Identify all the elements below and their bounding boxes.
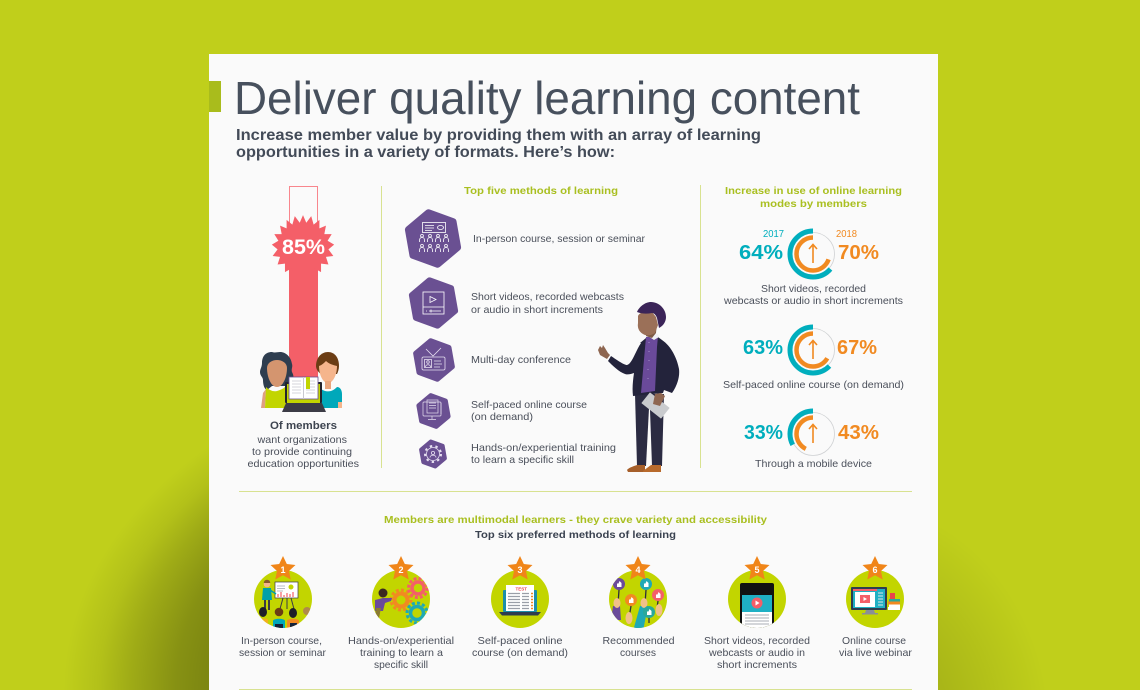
panel: increase in online learning bbox=[723, 185, 904, 470]
icon: hands-on hexagon bbox=[421, 441, 445, 467]
method 5: short videos: short increments bbox=[717, 659, 797, 671]
method 3: self-paced online course: Self-paced online bbox=[478, 635, 563, 647]
text: in-person: In-person course, session or seminar bbox=[473, 233, 645, 245]
method 6: live webinar bbox=[839, 556, 912, 659]
method 4: recommended courses: courses bbox=[620, 647, 656, 659]
text: short videos: or audio in short increments bbox=[471, 304, 603, 316]
stat: mobile device 33% to 43%: Through a mobile device bbox=[755, 458, 872, 470]
panel: 85% of members bbox=[248, 186, 359, 470]
white content panel bbox=[209, 54, 938, 690]
stat: short videos 64% to 70%: Short videos, recorded bbox=[761, 283, 866, 295]
text: hands-on: to learn a specific skill bbox=[471, 454, 574, 466]
method 2: hands-on training: specific skill bbox=[374, 659, 428, 671]
heading: top five methods: Top five methods of learning bbox=[464, 185, 618, 197]
text: multi-day conference: Multi-day conference bbox=[471, 354, 571, 366]
method 5: short videos bbox=[704, 556, 810, 671]
stat: short videos 64% to 70%: 2018 bbox=[836, 229, 857, 240]
method 4: recommended courses: Recommended bbox=[602, 635, 675, 647]
method 1: in-person course bbox=[239, 556, 326, 659]
heading: multimodal learners: Members are multimodal learners - they crave variety and accessibility bbox=[384, 514, 767, 526]
icon: conference hexagon bbox=[416, 341, 452, 379]
method 6: live webinar: via live webinar bbox=[839, 647, 912, 659]
panel: top five methods of learning bbox=[409, 185, 679, 472]
method 6: live webinar: Online course bbox=[842, 635, 906, 647]
subheading: top six methods: Top six preferred methods of learning bbox=[475, 529, 676, 541]
icon: in-person hexagon bbox=[409, 213, 457, 264]
method 2: hands-on training bbox=[348, 556, 454, 671]
stat: self-paced 63% to 67%: 67% bbox=[837, 337, 877, 359]
method 1: in-person course: session or seminar bbox=[239, 647, 326, 659]
icon: self-paced hexagon bbox=[418, 395, 449, 427]
caption: of members: Of members bbox=[270, 420, 337, 432]
title accent tab bbox=[209, 81, 221, 112]
method 3: self-paced online course: TEST bbox=[516, 586, 527, 592]
rank star 3: 3 bbox=[517, 565, 523, 575]
starburst with 85% bbox=[272, 215, 334, 277]
stat: short videos 64% to 70%: webcasts or audio in short increments bbox=[723, 295, 903, 307]
text: self-paced bbox=[471, 399, 587, 423]
caption: of members: to provide continuing bbox=[252, 446, 352, 458]
stat: mobile device 33% to 43%: 33% bbox=[744, 422, 783, 444]
stat: mobile device 33% to 43%: 43% bbox=[838, 422, 879, 444]
heading: increase in use bbox=[725, 185, 902, 210]
method 1: in-person course: In-person course, bbox=[241, 635, 322, 647]
caption: of members: want organizations bbox=[256, 434, 347, 446]
thermometer bar bbox=[289, 186, 318, 385]
method 3: self-paced online course bbox=[472, 556, 568, 659]
rank star 1: 1 bbox=[280, 565, 286, 575]
stat: short videos 64% to 70%: 70% bbox=[838, 242, 879, 264]
text: short videos: Short videos, recorded webcasts bbox=[471, 291, 624, 303]
rank star 6: 6 bbox=[872, 565, 878, 575]
stat: self-paced 63% to 67% bbox=[723, 327, 904, 391]
stat: short videos 64% to 70% bbox=[723, 229, 903, 307]
caption: of members bbox=[248, 420, 359, 470]
starburst with 85%: 85% bbox=[282, 236, 325, 259]
method 5: short videos: webcasts or audio in bbox=[708, 647, 805, 659]
stat: short videos 64% to 70%: 2017 bbox=[763, 229, 784, 240]
method 2: hands-on training: Hands-on/experiential bbox=[348, 635, 454, 647]
illustration: woman, man and laptop bbox=[260, 352, 342, 412]
title: Deliver quality learning content bbox=[234, 72, 860, 124]
text: hands-on: Hands-on/experiential training bbox=[471, 442, 616, 454]
rank star 4: 4 bbox=[635, 565, 641, 575]
panel: top six preferred methods bbox=[239, 556, 912, 671]
method 5: short videos: Short videos, recorded bbox=[704, 635, 810, 647]
subtitle bbox=[236, 127, 761, 161]
rank star 5: 5 bbox=[754, 565, 760, 575]
heading: increase in use: Increase in use of online learning bbox=[725, 185, 902, 197]
text: hands-on bbox=[471, 442, 616, 466]
method 3: self-paced online course: course (on demand) bbox=[472, 647, 568, 659]
subtitle: Increase member value by providing them with an array of learning bbox=[236, 127, 761, 144]
stat: mobile device 33% to 43% bbox=[744, 411, 879, 470]
caption: of members: education opportunities bbox=[248, 458, 359, 470]
method 2: hands-on training: training to learn a bbox=[360, 647, 443, 659]
heading: increase in use: modes by members bbox=[760, 198, 867, 210]
subtitle: opportunities in a variety of formats. Here’s how: bbox=[236, 144, 615, 161]
stat: self-paced 63% to 67%: 63% bbox=[743, 337, 783, 359]
icon: short video hexagon bbox=[412, 280, 455, 326]
illustration: presenter bbox=[598, 302, 679, 472]
stat: short videos 64% to 70%: 64% bbox=[739, 242, 783, 264]
rank star 2: 2 bbox=[398, 565, 404, 575]
text: self-paced: (on demand) bbox=[471, 411, 533, 423]
stat: self-paced 63% to 67%: Self-paced online course (on demand) bbox=[723, 379, 904, 391]
text: short videos bbox=[471, 291, 624, 316]
method 4: recommended courses bbox=[602, 556, 675, 659]
text: self-paced: Self-paced online course bbox=[471, 399, 587, 411]
